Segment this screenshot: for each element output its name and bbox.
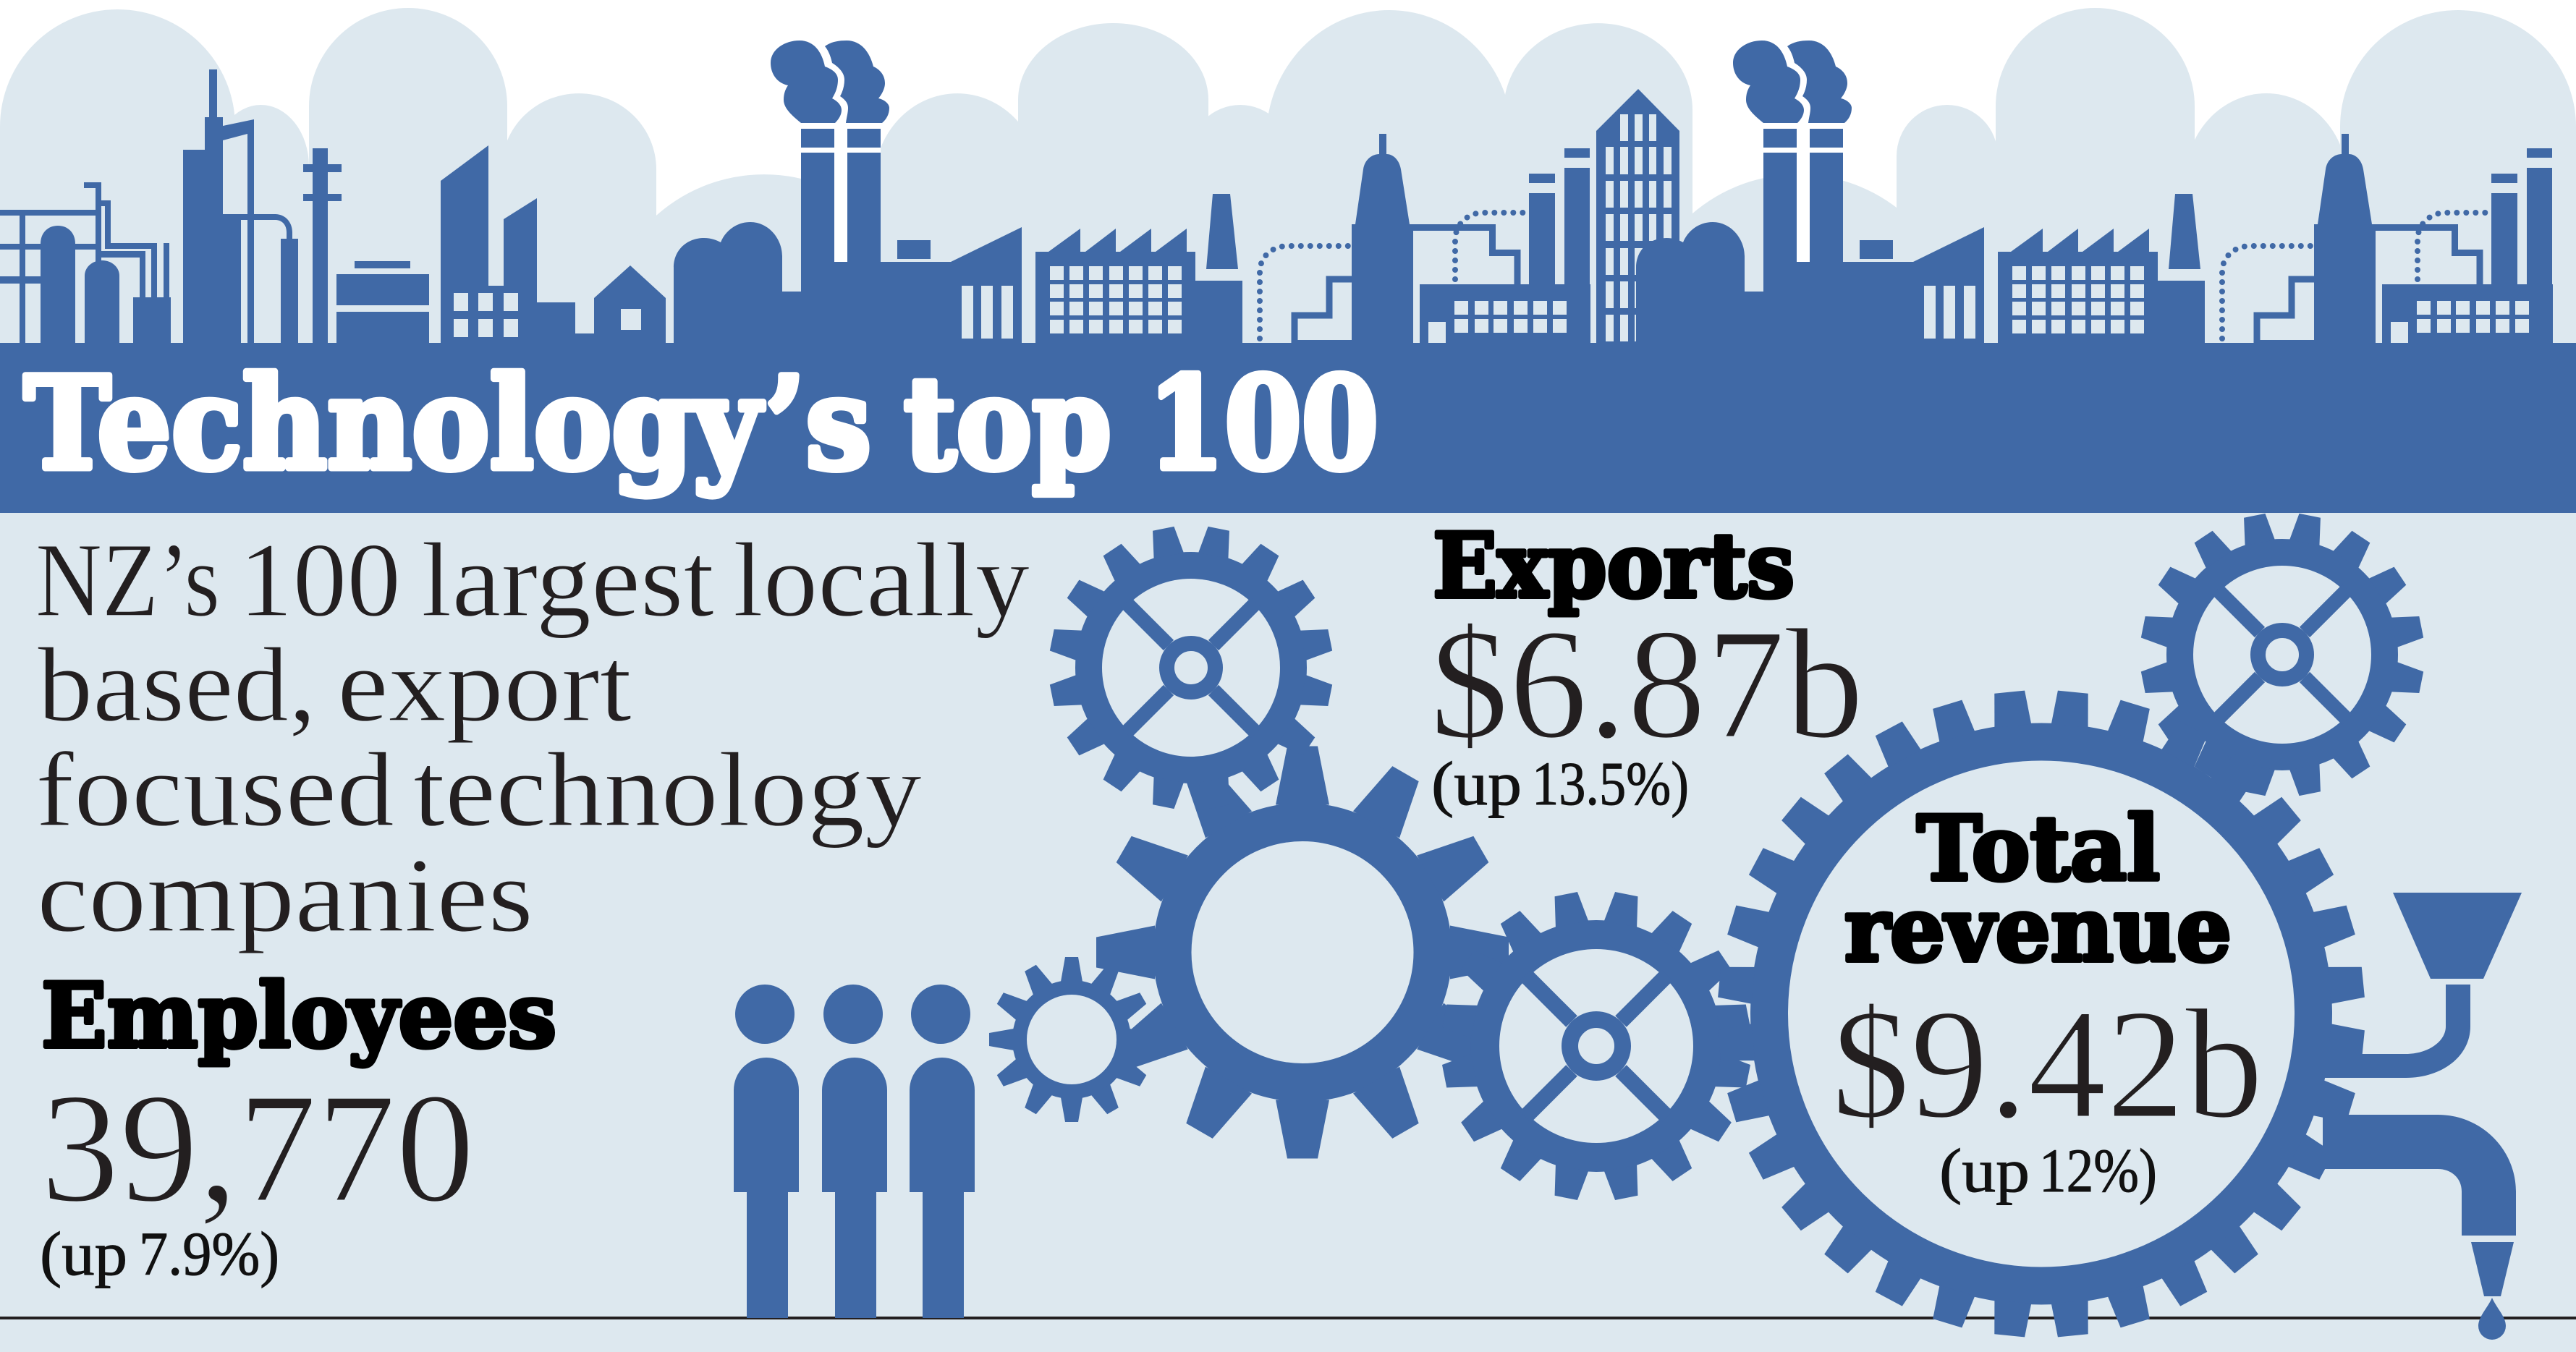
description text xyxy=(35,521,1030,954)
employees stat xyxy=(40,964,556,1288)
description text: NZ’s xyxy=(35,521,220,639)
total revenue stat xyxy=(1831,797,2263,1205)
exports stat: 13.5%) xyxy=(1532,749,1689,818)
gear: spoked gear upper left xyxy=(1049,526,1333,809)
description text: largest xyxy=(421,521,714,639)
gear: spoked gear upper right xyxy=(2140,513,2424,796)
skyline: building and house windows xyxy=(454,293,641,337)
skyline: refinery and towers at left xyxy=(0,69,666,343)
title band xyxy=(0,343,2576,513)
employees stat: Employees xyxy=(41,964,556,1068)
total revenue stat: (up xyxy=(1939,1136,2030,1205)
skyline: repeated factory complex at right xyxy=(1636,41,2553,343)
skyline: factory complex with chimneys xyxy=(674,41,1590,343)
description text: 100 xyxy=(239,521,401,639)
description text: focused xyxy=(35,731,394,849)
employees stat: 7.9%) xyxy=(139,1219,279,1288)
employees stat: (up xyxy=(40,1219,127,1288)
description text: technology xyxy=(413,731,922,849)
skyline: tall tower with windows xyxy=(1596,89,1679,343)
description text: based, xyxy=(38,626,316,744)
title xyxy=(24,349,1378,498)
cloud backdrop xyxy=(0,8,2576,347)
exports stat xyxy=(1430,514,1864,818)
icon: outlet tap with drop xyxy=(2323,1115,2516,1340)
employees stat: 39,770 xyxy=(41,1061,475,1236)
total revenue stat: Total xyxy=(1917,797,2160,901)
lower panel background xyxy=(0,506,2576,1352)
exports stat: (up xyxy=(1431,749,1522,818)
total revenue stat: 12%) xyxy=(2039,1136,2157,1205)
gear: big total revenue gear xyxy=(1718,690,2365,1338)
title: top xyxy=(904,349,1111,498)
description text: companies xyxy=(37,836,533,954)
exports stat: $6.87b xyxy=(1430,597,1864,772)
title: Technology’s xyxy=(24,349,871,498)
description text: locally xyxy=(733,521,1030,639)
exports stat: Exports xyxy=(1433,514,1795,618)
icon: three people xyxy=(734,985,975,1318)
gear: large plain centre gear xyxy=(1096,747,1509,1159)
total revenue stat: $9.42b xyxy=(1831,977,2263,1152)
gear: spoked gear lower centre xyxy=(1441,891,1751,1201)
gear: small plain gear xyxy=(989,957,1154,1122)
baseline rule xyxy=(0,1317,2576,1319)
description text: export xyxy=(337,626,632,744)
icon: funnel and inlet pipe xyxy=(2325,893,2522,1078)
title: 100 xyxy=(1148,349,1378,498)
total revenue stat: revenue xyxy=(1844,878,2232,982)
